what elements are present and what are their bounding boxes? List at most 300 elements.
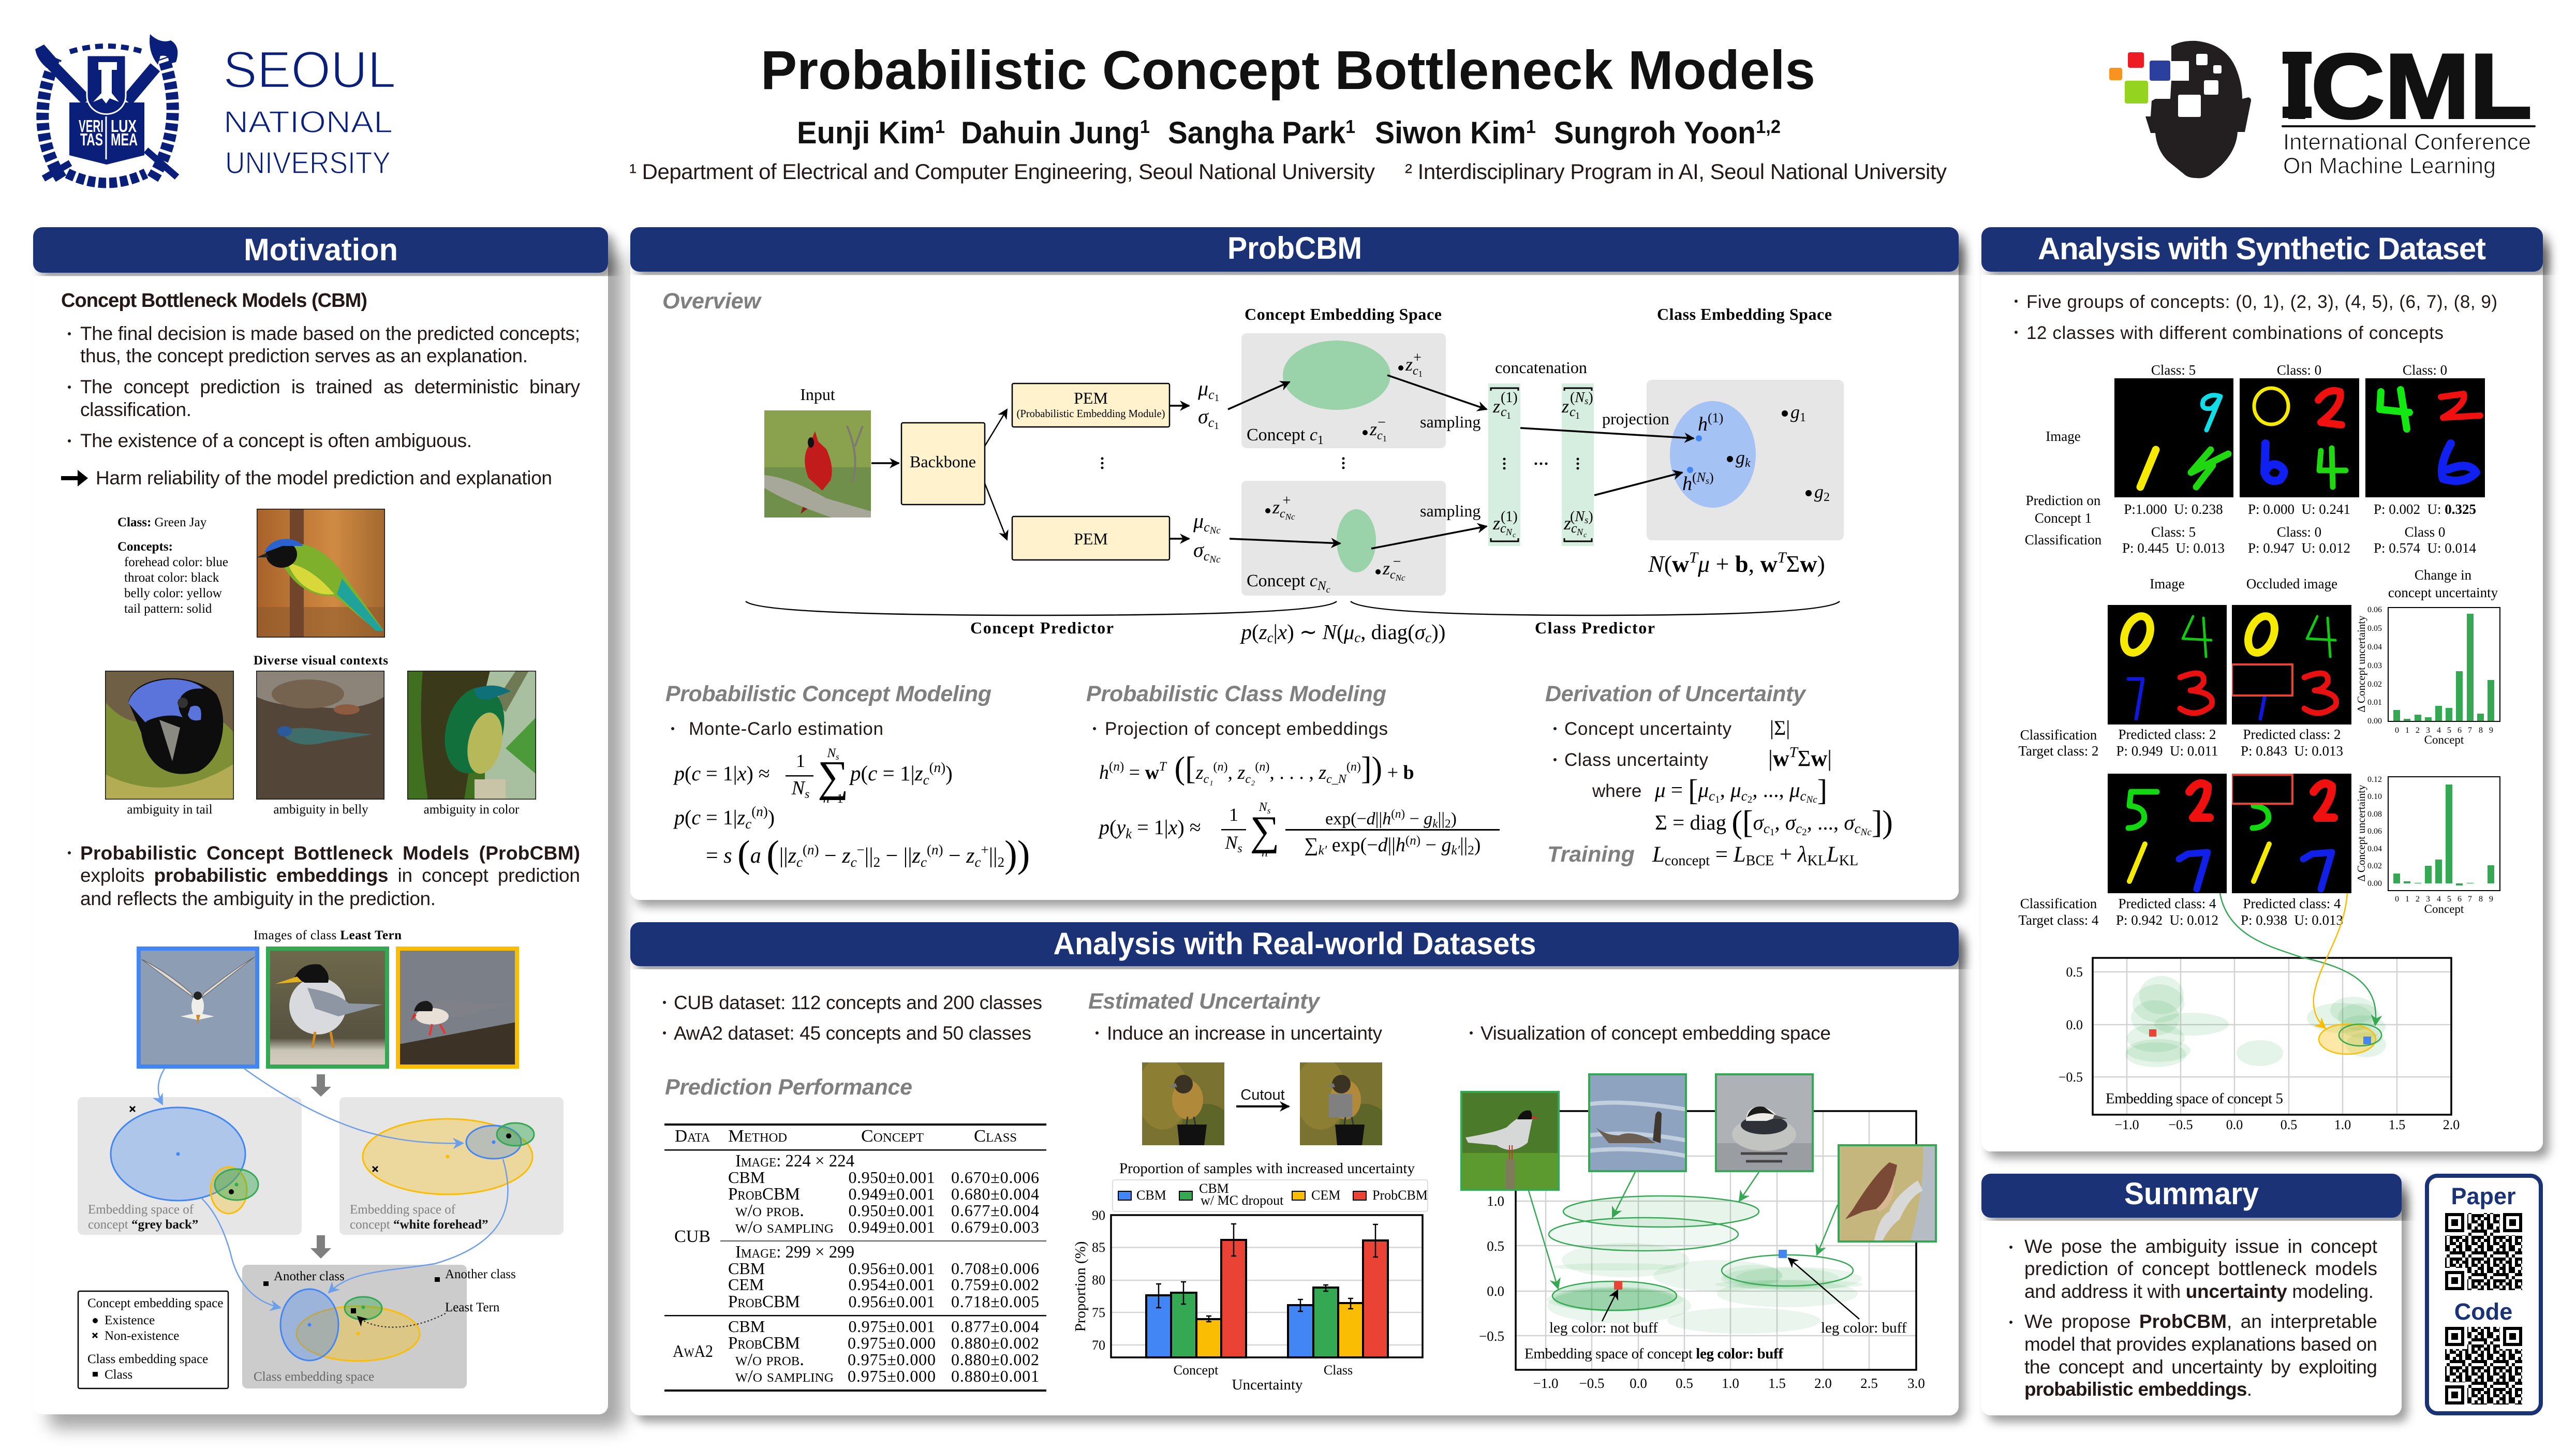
section: probabilistic concept modeling: = s [706, 844, 732, 868]
table: prediction performance: 0.975±0.000 [848, 1367, 936, 1385]
authors: Sangha Park [1168, 115, 1356, 150]
chart: change in concept uncertainty 2: 3 [2426, 895, 2430, 904]
table: prediction performance: w/o prob. [735, 1201, 804, 1220]
figure: concept prediction examples: P: 0.947 U: 0.012 [2248, 540, 2350, 556]
section: probabilistic class modeling: exp(− [1327, 834, 1378, 856]
concatenated columns: s [1585, 396, 1588, 407]
section: probabilistic class modeling: , [1228, 762, 1238, 783]
section: probabilistic class modeling: (n) [1391, 807, 1405, 820]
figure: occlusion row 2: P: 0.938 U: 0.013 [2241, 912, 2343, 928]
text block: datasets: AwA2 dataset: 45 concepts and 50 classes [674, 1023, 1031, 1044]
image: ambiguity in belly [256, 671, 384, 817]
text block: summary points: model that provides explanations based on [2024, 1334, 2377, 1355]
chart: embedding space of concept 5: 0.5 [2281, 1117, 2297, 1132]
section: probabilistic concept modeling: p(c = 1|z [674, 806, 745, 829]
affiliations [629, 159, 1947, 184]
text block: CBM description: Concept Bottleneck Models (CBM) [61, 290, 367, 312]
image: occluded 0 4 7 3 [2232, 605, 2351, 724]
legend: Non-existence [105, 1329, 179, 1343]
figure: concept prediction examples: P: 0.445 U: 0.013 [2122, 540, 2225, 556]
section: probabilistic class modeling: T [1159, 760, 1167, 774]
image: tern standing [266, 947, 389, 1069]
section: derivation of uncertainty: Σ = diag [1655, 810, 1726, 834]
chart: change in concept uncertainty 1: 0.02 [2367, 680, 2382, 689]
section: probabilistic class modeling: z [1318, 762, 1326, 783]
chart: embedding space leg color: leg color: not buff [1549, 1320, 1658, 1336]
chart: embedding space leg color: 0.5 [1676, 1376, 1693, 1391]
panel: concept c1 space: 1 [1317, 434, 1324, 447]
chart: change in concept uncertainty 1: 0.01 [2367, 698, 2382, 707]
concatenated columns: c [1513, 531, 1516, 539]
section: probabilistic concept modeling: ) [768, 806, 775, 829]
text: diverse visual contexts: Diverse visual contexts [254, 654, 388, 668]
section: probabilistic concept modeling: ) [1004, 833, 1017, 876]
section: derivation of uncertainty: Concept uncertainty [1564, 719, 1731, 739]
panel: embedding space of white forehead [339, 1097, 564, 1235]
formula: class distribution: + b, w [1716, 551, 1778, 577]
chart: embedding space leg color [1460, 1073, 1937, 1391]
section: derivation of uncertainty: L [1652, 842, 1665, 867]
section: derivation of uncertainty: 1 [1715, 794, 1720, 805]
chart: change in concept uncertainty 2: 5 [2447, 895, 2451, 904]
panel: class embedding: k [1745, 456, 1751, 470]
table: prediction performance: 0.759±0.002 [951, 1275, 1039, 1294]
chart: embedding space of concept 5: Embedding space of concept 5 [2106, 1090, 2283, 1107]
heading: ProbCBM: ProbCBM [1227, 231, 1362, 265]
table: prediction performance: 0.950±0.001 [849, 1201, 935, 1220]
panel: embedding space of grey back: Embedding space of [88, 1203, 194, 1217]
image: tern on rail [396, 947, 519, 1069]
concatenated columns: c [1500, 521, 1506, 536]
panel: class embedding: g [1790, 402, 1800, 422]
section: probabilistic class modeling: ) [1451, 809, 1457, 829]
image: tern in flight [137, 947, 259, 1069]
image: ambiguity in color: ambiguity in color [424, 803, 520, 817]
authors: Eunji Kim [797, 115, 940, 150]
panel: embedding space of grey back [78, 1097, 302, 1235]
diagram: overview: Concept Embedding Space [1245, 305, 1442, 323]
chart: change in concept uncertainty 1: 0 [2395, 726, 2399, 735]
image: input cardinal [764, 410, 871, 518]
section: probabilistic concept modeling: || [989, 844, 998, 868]
section: derivation of uncertainty: Nc [1806, 794, 1817, 805]
section: probabilistic concept modeling: || [779, 844, 788, 868]
section: derivation of uncertainty: Derivation of Uncertainty [1545, 682, 1807, 706]
section: derivation of uncertainty: λ [1797, 842, 1808, 867]
text block: green jay concepts: Class: Green Jay [117, 515, 207, 529]
section: probabilistic concept modeling: (n) [803, 842, 819, 857]
box: backbone [901, 423, 985, 505]
figure: occlusion row 1 [2018, 567, 2500, 759]
formula: class distribution: Σ [1786, 551, 1800, 577]
section: probabilistic concept modeling: n=1 [823, 792, 843, 806]
concatenated columns: N [1505, 527, 1513, 537]
section: probabilistic concept modeling: N [827, 746, 836, 760]
chart: embedding space leg color: 0.5 [1487, 1238, 1504, 1254]
icon: code QR [2445, 1327, 2522, 1404]
chart: change in concept uncertainty 2 [2355, 775, 2500, 915]
section: probabilistic class modeling: w [1145, 762, 1160, 783]
arrow: cutout: Cutout [1240, 1087, 1285, 1103]
figure: occlusion row 1: concept uncertainty [2388, 585, 2498, 600]
chart: change in concept uncertainty 1: 0.03 [2367, 661, 2382, 670]
text block: summary points: probabilistic embeddings. [2024, 1379, 2252, 1400]
text block: green jay concepts: belly color: yellow [124, 586, 222, 600]
chart: change in concept uncertainty 1: 0.05 [2367, 624, 2382, 633]
section: probabilistic concept modeling: Probabilistic Concept Modeling [665, 682, 991, 706]
chart: embedding space leg color: Embedding space of concept leg color: buff [1524, 1346, 1783, 1362]
section: probabilistic class modeling: k′ [1319, 844, 1327, 857]
heading: estimated uncertainty: Estimated Uncertainty [1088, 989, 1321, 1014]
text: images of class Least Tern: Images of class Least Tern [254, 928, 402, 942]
concatenated columns [1488, 383, 1594, 546]
panel: class embedding: (N [1692, 470, 1706, 485]
figure: occlusion row 2 [2018, 774, 2500, 928]
text block: datasets [663, 992, 1042, 1044]
chart: embedding space of concept 5: −0.5 [2059, 1070, 2083, 1085]
section: probabilistic concept modeling: c [745, 816, 751, 832]
figure: occlusion row 2: Target class: 4 [2018, 912, 2099, 928]
table: prediction performance: 0.949±0.001 [849, 1185, 935, 1203]
panel: class embedding space: Class embedding space [254, 1370, 374, 1384]
section: derivation of uncertainty: , [1720, 778, 1730, 802]
section: probabilistic concept modeling: 1 [796, 750, 805, 771]
panel: paper and code QR [2427, 1176, 2541, 1413]
section: probabilistic concept modeling [665, 682, 1030, 876]
panel: concept c1 space [1241, 333, 1446, 448]
figure: occlusion row 1: P: 0.843 U: 0.013 [2241, 743, 2343, 759]
concatenated columns: ) [1588, 509, 1593, 525]
labels: mu and sigma: c [1208, 387, 1215, 402]
chart: change in concept uncertainty 1: 2 [2416, 726, 2420, 735]
section: derivation of uncertainty: 2 [1802, 827, 1807, 838]
section: probabilistic class modeling: k [1432, 817, 1438, 830]
section: probabilistic class modeling: h [1099, 762, 1109, 783]
section: probabilistic class modeling: (n) [1405, 834, 1420, 848]
text: harm reliability: Harm reliability of the model prediction and explanation [96, 467, 552, 489]
concatenated columns: 1 [1575, 410, 1580, 421]
chart: change in concept uncertainty 2: Δ Concept uncertainty [2355, 785, 2367, 882]
figure: concept prediction examples: P:1.000 U: 0.238 [2124, 501, 2223, 517]
image: wren on branch [1838, 1144, 1937, 1243]
panel: class embedding space: Another class [274, 1269, 345, 1283]
image: digits 0 4 7 3 [2108, 605, 2227, 724]
figure: occlusion row 1: Predicted class: 2 [2243, 727, 2341, 742]
icon: paper QR [2445, 1213, 2522, 1290]
section: probabilistic class modeling [1086, 682, 1500, 860]
table: prediction performance: Concept [861, 1127, 924, 1146]
table: prediction performance: CBM [728, 1168, 765, 1187]
table: prediction performance: 0.880±0.001 [951, 1367, 1039, 1385]
section: probabilistic class modeling: ]) [1361, 751, 1382, 786]
section: probabilistic concept modeling: c [851, 854, 857, 870]
chart: embedding space leg color: −0.5 [1479, 1328, 1504, 1344]
table: prediction performance: ProbCBM [728, 1185, 800, 1204]
section: probabilistic concept modeling: p(c = 1|z [850, 761, 923, 785]
panel: concept cNc space: Concept c [1247, 571, 1317, 590]
section: derivation of uncertainty: 1 [1770, 827, 1774, 838]
figure: concept prediction examples: P: 0.000 U: 0.241 [2248, 501, 2350, 517]
box: PEM 1 [1012, 383, 1169, 427]
legend: Class [105, 1368, 132, 1382]
section: probabilistic concept modeling: a [750, 844, 761, 868]
chart: embedding space leg color: −0.5 [1579, 1376, 1604, 1391]
figure: concept prediction examples [2025, 362, 2485, 556]
concatenated columns: (1) [1501, 509, 1518, 525]
section: probabilistic class modeling: z [1195, 762, 1204, 783]
labels: mu and sigma: σ [1198, 405, 1208, 428]
section: probabilistic class modeling: 1 [1229, 804, 1238, 825]
labels: predictors: c [1267, 630, 1274, 645]
concatenated columns: (1) [1501, 390, 1518, 406]
section: derivation of uncertainty: ]) [1872, 805, 1893, 840]
table: prediction performance: 0.680±0.004 [951, 1185, 1039, 1203]
chart: change in concept uncertainty 1: 9 [2489, 726, 2493, 735]
section: probabilistic concept modeling: (n) [751, 804, 768, 819]
diagram: overview: Input [800, 385, 835, 404]
section: probabilistic class modeling: d||h [1378, 834, 1405, 856]
chart: embedding space leg color: 2.0 [1814, 1376, 1832, 1391]
section: probabilistic concept modeling: || [865, 844, 874, 868]
table: prediction performance: CUB [674, 1227, 710, 1246]
section: derivation of uncertainty: σ [1753, 810, 1765, 834]
section: derivation of uncertainty: c [1800, 788, 1807, 804]
labels: predictors: p(z [1241, 620, 1267, 644]
chart: proportion of samples: Uncertainty [1232, 1377, 1303, 1393]
table: prediction performance: ProbCBM [728, 1334, 800, 1353]
chart: change in concept uncertainty 1 [2355, 605, 2500, 746]
figure: concept prediction examples: P: 0.002 U: 0.325 [2374, 501, 2476, 517]
labels: concept embedding points: 1 [1383, 434, 1387, 443]
labels: predictors: σ [1415, 620, 1426, 644]
chart: proportion of samples: 80 [1092, 1273, 1105, 1288]
section: probabilistic class modeling: s [1267, 806, 1271, 816]
heading: real-world datasets: Analysis with Real-world Datasets [1054, 926, 1536, 961]
chart legend: w/ MC dropout [1201, 1193, 1284, 1208]
chart: change in concept uncertainty 2: 0 [2395, 895, 2399, 904]
heading: Motivation [33, 227, 608, 273]
table: prediction performance: 0.956±0.001 [849, 1292, 935, 1311]
diagram: overview [746, 305, 1844, 645]
chart: embedding space of concept 5: 0.0 [2066, 1017, 2083, 1032]
labels: mu and sigma: μ [1193, 509, 1204, 533]
arrows: overview flow [871, 375, 1694, 549]
chart: change in concept uncertainty 1: 0.00 [2367, 717, 2382, 726]
formula: class distribution: μ [1697, 551, 1710, 577]
text block: green jay concepts: Concepts: [117, 540, 173, 554]
text block: green jay concepts [117, 515, 228, 616]
concatenated columns: c [1583, 531, 1587, 539]
labels: mu and sigma: c [1204, 520, 1210, 535]
section: probabilistic class modeling: N [1225, 832, 1237, 853]
Seoul National University logo [35, 34, 396, 183]
arrows: concept to embedding links [158, 1069, 508, 1327]
figure: occlusion row 1: Classification [2020, 727, 2097, 743]
chart: change in concept uncertainty 1: 0.04 [2367, 643, 2382, 652]
section: derivation of uncertainty: c [1796, 821, 1802, 836]
section: probabilistic concept modeling: c [921, 854, 927, 870]
panel: concept cNc space: N [1317, 579, 1327, 593]
section: probabilistic concept modeling: N [792, 777, 805, 799]
chart: change in concept uncertainty 2: 7 [2468, 895, 2472, 904]
section: probabilistic concept modeling: z [788, 844, 796, 868]
panel: Motivation [33, 227, 608, 1414]
authors: Siwon Kim [1375, 115, 1534, 150]
text block: summary points: prediction of concept bottleneck models [2024, 1258, 2377, 1279]
labels: concept embedding points: z [1405, 354, 1413, 375]
figure: occlusion row 2: P: 0.942 U: 0.012 [2116, 912, 2218, 928]
section: derivation of uncertainty: σ [1785, 810, 1797, 834]
section: probabilistic class modeling: = 1| [1132, 816, 1168, 839]
text block: summary points: We propose ProbCBM, an interpretable [2024, 1311, 2377, 1332]
labels: mu and sigma: 1 [1215, 393, 1219, 404]
icon: ICML head [2109, 41, 2251, 178]
text block: ProbCBM description: Probabilistic Concept Bottleneck Models (ProbCBM) [80, 842, 580, 864]
image: digits 4 2 6 [2365, 378, 2485, 497]
text block: CBM description [61, 290, 581, 451]
chart: embedding space leg color: 1.0 [1722, 1376, 1739, 1391]
heading: prediction performance: Prediction Performance [665, 1075, 912, 1100]
labels: predictors: | [1274, 620, 1278, 644]
figure: occlusion row 1: P: 0.949 U: 0.011 [2116, 743, 2218, 759]
section: derivation of uncertainty: 2 [1748, 794, 1752, 805]
chart: embedding space of concept 5 [2059, 893, 2460, 1132]
labels: flow captions: sampling [1420, 501, 1481, 520]
section: probabilistic concept modeling: s [805, 788, 809, 801]
panel: concept cNc space: c [1326, 584, 1330, 595]
labels: concept embedding points: − [1378, 415, 1386, 431]
image: digits 0 2 6 4 [2240, 378, 2359, 497]
panel: class embedding: h [1698, 413, 1708, 435]
ICML logo [2109, 35, 2536, 179]
chart: change in concept uncertainty 2: 0.06 [2367, 827, 2382, 836]
figure: occlusion row 2: Predicted class: 4 [2119, 896, 2216, 911]
labels: flow captions: sampling [1420, 412, 1481, 431]
panel: Summary [1981, 1174, 2402, 1415]
chart: change in concept uncertainty 1: 4 [2437, 726, 2441, 735]
table: prediction performance: w/o sampling [735, 1367, 834, 1386]
section: probabilistic class modeling: 2 [1445, 817, 1451, 830]
table: prediction performance [664, 1123, 1046, 1392]
labels: mu and sigma: c [1204, 549, 1210, 564]
section: derivation of uncertainty: w| [1811, 746, 1832, 771]
ICML logo: ICML [2283, 35, 2532, 138]
formula: class distribution: T [1689, 549, 1699, 566]
box: PEM 2: PEM [1074, 529, 1108, 548]
text: induce uncertainty: Induce an increase in uncertainty [1107, 1023, 1383, 1044]
section: derivation of uncertainty: c [1741, 788, 1748, 804]
concatenated columns: (N [1570, 390, 1585, 406]
legend: Concept embedding space [87, 1296, 223, 1310]
heading: summary [1981, 1174, 2402, 1218]
chart: change in concept uncertainty 1: 5 [2447, 726, 2451, 735]
panel: paper and code QR: Code [2454, 1298, 2512, 1325]
text: least tern: Least Tern [445, 1300, 500, 1314]
affiliations: ¹ Department of Electrical and Computer Engineering, Seoul National University [629, 159, 1375, 184]
figure: concept prediction examples: Class: 0 [2403, 362, 2447, 378]
chart: change in concept uncertainty 2: Concept [2424, 903, 2464, 915]
panel: embedding space of white forehead: concept “white forehead” [350, 1218, 488, 1232]
panel: ProbCBM [630, 227, 1959, 900]
box: PEM 1: (Probabilistic Embedding Module) [1016, 407, 1165, 420]
panel: class embedding: h [1682, 473, 1692, 495]
chart: change in concept uncertainty 1: Δ Concept uncertainty [2355, 615, 2367, 713]
chart legend: CBM [1199, 1181, 1229, 1196]
ICML logo: On Machine Learning [2283, 153, 2496, 179]
chart: embedding space leg color: 2.5 [1860, 1376, 1878, 1391]
section: probabilistic class modeling: Projection of concept embeddings [1105, 719, 1388, 739]
chart: proportion of samples: Proportion of samples with increased uncertainty [1119, 1160, 1415, 1177]
table: prediction performance: Data [675, 1127, 710, 1146]
section: probabilistic class modeling: − [1405, 809, 1424, 829]
formula: class distribution: w) [1800, 551, 1825, 577]
section: probabilistic class modeling: = [1124, 762, 1145, 783]
section: derivation of uncertainty: [ [1688, 773, 1698, 807]
chart: embedding space leg color: 1.5 [1768, 1376, 1786, 1391]
panel: class embedding: g [1814, 481, 1824, 502]
table: prediction performance: 0.670±0.006 [951, 1168, 1039, 1187]
icon: university crest: MEA [111, 130, 138, 149]
table: prediction performance: Image: 224 × 224 [735, 1151, 854, 1171]
figure: occlusion row 1: Target class: 2 [2018, 743, 2099, 759]
chart: embedding space of concept 5: 1.5 [2389, 1117, 2405, 1132]
Seoul National University logo: SEOUL [223, 41, 396, 99]
table: prediction performance: 0.880±0.002 [951, 1334, 1039, 1352]
section: derivation of uncertainty: σ [1844, 810, 1855, 834]
figure: concept prediction examples: P: 0.574 U: 0.014 [2374, 540, 2477, 556]
diagram: overview: Class Embedding Space [1657, 305, 1832, 323]
chart: proportion of samples [1072, 1160, 1428, 1393]
arrow: harm [61, 470, 88, 486]
text block: summary points: and address it with uncertainty modeling. [2024, 1281, 2374, 1302]
section: derivation of uncertainty: L [1826, 842, 1839, 867]
section: probabilistic concept modeling: ∑ [818, 752, 849, 801]
box: PEM 1: PEM [1074, 389, 1108, 407]
chart: embedding space of concept 5: −0.5 [2168, 1117, 2193, 1132]
section: derivation of uncertainty: Σ [1798, 746, 1811, 771]
image: grebe on water [1588, 1073, 1687, 1172]
arrow: down 1 [310, 1074, 331, 1097]
chart: proportion of samples: 90 [1092, 1208, 1105, 1223]
chart: change in concept uncertainty 2: 0.12 [2367, 775, 2382, 784]
table: prediction performance: 0.877±0.004 [951, 1317, 1039, 1336]
section: derivation of uncertainty: = [1710, 842, 1734, 867]
chart: embedding space of concept 5: −1.0 [2114, 1117, 2139, 1132]
labels: mu and sigma: 1 [1214, 421, 1219, 432]
labels: mu and sigma: μ [1198, 377, 1208, 400]
panel: paper and code QR: Paper [2451, 1183, 2516, 1209]
labels: mu and sigma: c [1208, 415, 1215, 430]
section: derivation of uncertainty: Training [1547, 842, 1635, 867]
section: probabilistic class modeling: n [1262, 846, 1268, 860]
chart: proportion of samples: Proportion (%) [1072, 1241, 1089, 1332]
image: occluded 5 2 1 7 [2232, 774, 2351, 893]
chart: proportion of samples: 85 [1092, 1240, 1105, 1255]
section: derivation of uncertainty: + [1774, 842, 1798, 867]
text block: summary points: We pose the ambiguity issue in concept [2024, 1236, 2378, 1257]
section: derivation of uncertainty: , ..., [1752, 778, 1789, 802]
section: probabilistic class modeling: c_N [1326, 773, 1348, 786]
box: backbone: Backbone [910, 452, 976, 471]
section: derivation of uncertainty: KL [1839, 853, 1858, 869]
section: probabilistic concept modeling: − [857, 842, 865, 857]
section: probabilistic class modeling: || [1460, 834, 1468, 856]
chart: proportion of samples: 70 [1092, 1338, 1105, 1353]
text block: summary points: the concept and uncertainty by exploiting [2024, 1356, 2377, 1378]
labels: predictors: Concept Predictor [970, 618, 1114, 637]
section: probabilistic concept modeling: c [975, 854, 981, 870]
chart: change in concept uncertainty 2: 0.04 [2367, 845, 2382, 853]
